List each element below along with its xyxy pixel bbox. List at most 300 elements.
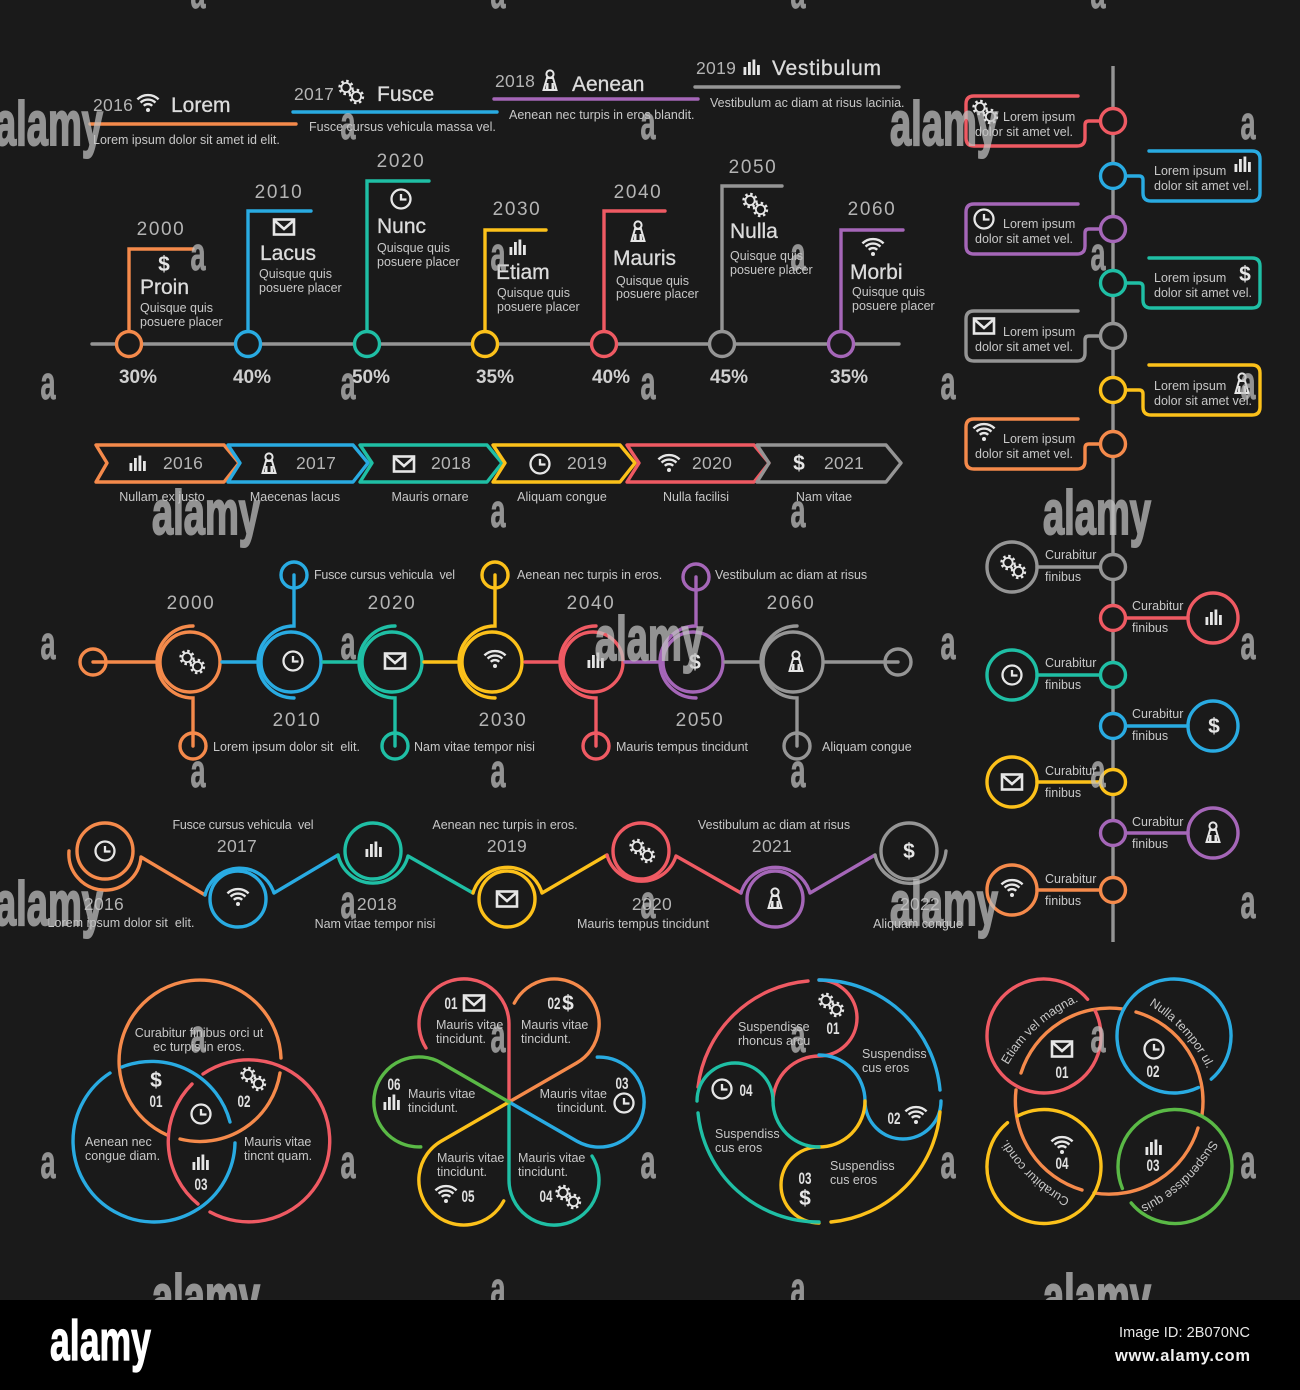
zig node 2021: 2021 [752, 836, 792, 856]
flag 2040 Mauris: Quisque quis [616, 274, 689, 288]
callout left orange [966, 419, 1126, 469]
stock watermark: a [190, 1009, 206, 1062]
green ring 03: 03 [1146, 1156, 1160, 1175]
flower item 06: 06 [388, 1075, 400, 1094]
stock watermark: a [190, 227, 206, 280]
flag 2000 Proin: Quisque quis [140, 301, 213, 315]
flower item 04: 04 [540, 1187, 553, 1206]
callout left purple: dolor sit amet vel. [975, 232, 1073, 246]
node 2050 dollar [625, 564, 867, 731]
flag 2020 Nunc: Nunc [377, 215, 426, 238]
blue ring 02: 02 [1146, 1062, 1160, 1081]
callout right teal [1100, 258, 1260, 308]
flag 2050 Nulla: 45% [710, 367, 748, 388]
node 2040 bars: 2040 [567, 593, 615, 614]
yellow ring 04 [985, 1108, 1103, 1226]
red ring [168, 1060, 330, 1222]
flag 2010 Lacus: posuere placer [259, 281, 342, 295]
venn labels: Mauris vitae [244, 1135, 311, 1149]
flag 2000 Proin [116, 219, 223, 388]
branch right red [1100, 593, 1238, 643]
branch right blue: $ [1208, 715, 1220, 738]
swirl yellow [781, 1101, 940, 1223]
branch right purple: Curabitur [1132, 815, 1183, 829]
stock watermark: alamy [0, 870, 103, 939]
flower item 01: tincidunt. [436, 1032, 486, 1046]
stock watermark: a [790, 1009, 806, 1062]
stock watermark: a [790, 484, 806, 537]
flower item 03: Mauris vitae [540, 1087, 607, 1101]
callout left grey: dolor sit amet vel. [975, 340, 1073, 354]
stock watermark: a [1240, 356, 1256, 409]
flag 2060 Morbi: 2060 [848, 199, 896, 220]
petal green [357, 1040, 509, 1180]
swirl item 03: Suspendiss [830, 1159, 895, 1173]
flag 2020 Nunc: posuere placer [377, 255, 460, 269]
zig node 2022: Aliquam congue [873, 917, 963, 931]
step 2019 Vestibulum: Vestibulum ac diam at risus lacinia. [710, 96, 905, 110]
swirl teal [697, 1063, 819, 1222]
stock watermark: alamy [1043, 1263, 1151, 1332]
stock watermark: a [1240, 616, 1256, 669]
flower item 02 [521, 992, 588, 1046]
zig node 2017: Fusce cursus vehicula vel [172, 818, 314, 832]
venn labels: Aenean nec [85, 1135, 152, 1149]
stock watermark: a [790, 227, 806, 280]
blue ring 02: Nulla tempor ul. [1150, 998, 1214, 1068]
flag 2000 Proin: $ [158, 253, 170, 276]
chevron 2017 [228, 445, 368, 504]
branch left teal: Curabitur [1045, 656, 1096, 670]
step 2018 Aenean: 2018 [495, 71, 535, 91]
flower item 04: Mauris vitae [518, 1151, 585, 1165]
venn icons: 02 [238, 1092, 250, 1111]
stock watermark: alamy [1043, 479, 1151, 548]
swirl item 02: Suspendiss [862, 1047, 927, 1061]
branch right blue: Curabitur [1132, 707, 1183, 721]
chevron 2016: 2016 [163, 453, 203, 473]
flag 2050 Nulla [710, 157, 813, 388]
venn icons: 01 [150, 1092, 162, 1111]
step 2017 Fusce: Fusce cursus vehicula massa vel. [309, 120, 496, 134]
flower item 02: $ [562, 992, 574, 1015]
step 2019 Vestibulum [695, 57, 905, 110]
swirl item 04: Suspendiss [715, 1127, 780, 1141]
stock watermark: alamy [0, 90, 103, 159]
callout left red: dolor sit amet vel. [975, 125, 1073, 139]
branch left orange [987, 865, 1126, 915]
flag 2040 Mauris: Mauris [613, 247, 676, 270]
flag 2050 Nulla: Quisque quis [730, 249, 803, 263]
swirl item 04: 04 [740, 1081, 753, 1100]
node 2020 mail: Nam vitae tempor nisi [414, 740, 535, 754]
branch right blue [1100, 701, 1238, 751]
branch right red: Curabitur [1132, 599, 1183, 613]
swirl item 04: cus eros [715, 1141, 762, 1155]
node 2010 clock: Fusce cursus vehicula vel [314, 568, 455, 582]
venn labels: Curabitur finibus orci ut [135, 1026, 264, 1040]
venn labels: tincnt quam. [244, 1149, 312, 1163]
flag 2000 Proin: 30% [119, 367, 157, 388]
callout left red [966, 96, 1126, 146]
swirl blue [819, 980, 941, 1139]
node 2050 dollar: 2050 [676, 710, 724, 731]
stock watermark: a [940, 616, 956, 669]
callout left orange: dolor sit amet vel. [975, 447, 1073, 461]
node 2040 bars: Mauris tempus tincidunt [616, 740, 749, 754]
stock watermark: a [640, 96, 656, 149]
chevron 2021 [757, 445, 901, 504]
venn icons [150, 1068, 265, 1194]
node 2030 wifi: Aenean nec turpis in eros. [517, 568, 662, 582]
stock watermark: a [1090, 744, 1106, 797]
node 2060 person [725, 593, 912, 759]
zig node 2020: Mauris tempus tincidunt [577, 917, 710, 931]
flower item 03: tincidunt. [557, 1101, 607, 1115]
panel: venn diagram [73, 980, 330, 1222]
flower item 06: Mauris vitae [408, 1087, 475, 1101]
callout right yellow: Lorem ipsum [1154, 379, 1226, 393]
branch right blue: finibus [1132, 729, 1168, 743]
zig node 2021: Vestibulum ac diam at risus [698, 818, 850, 832]
callout right teal: dolor sit amet vel. [1154, 286, 1252, 300]
stock watermark: a [1090, 1009, 1106, 1062]
petal yellow [402, 1102, 554, 1241]
green ring 03: Suspendisse quis [1142, 1141, 1218, 1212]
stock watermark: a [640, 875, 656, 928]
zig node 2018 [315, 823, 473, 931]
venn icons: $ [150, 1069, 162, 1092]
blue ring 02 [1115, 977, 1233, 1095]
zig node 2019: 2019 [487, 836, 527, 856]
node 2050 dollar: Vestibulum ac diam at risus [715, 568, 867, 582]
flag 2050 Nulla: posuere placer [730, 263, 813, 277]
venn icons: 03 [194, 1175, 208, 1194]
chevron 2017: 2017 [296, 453, 336, 473]
callout right blue: Lorem ipsum [1154, 164, 1226, 178]
callout left orange: Lorem ipsum [1003, 432, 1075, 446]
venn labels: ec turpis in eros. [153, 1040, 245, 1054]
node 2060 person: 2060 [767, 593, 815, 614]
stock watermark: a [1240, 96, 1256, 149]
flag 2060 Morbi: 35% [830, 367, 868, 388]
swirl item 02 [862, 1047, 927, 1128]
flag 2030 Etiam: Etiam [496, 261, 550, 284]
panel: overlapping rings [985, 977, 1234, 1226]
flower item 01: Mauris vitae [436, 1018, 503, 1032]
branch left grey: finibus [1045, 570, 1081, 584]
footer band: Image ID: 2B070NC [1119, 1325, 1250, 1341]
flag 2020 Nunc: Quisque quis [377, 241, 450, 255]
flower item 05 [435, 1151, 504, 1206]
node 2000 gear: Lorem ipsum dolor sit elit. [213, 740, 360, 754]
panel: circle node timeline [80, 562, 912, 759]
callout left purple [966, 204, 1126, 254]
flag 2000 Proin: 2000 [137, 219, 185, 240]
branch left teal [987, 650, 1126, 700]
stock watermark: alamy [152, 1263, 260, 1332]
step 2017 Fusce: 2017 [294, 84, 334, 104]
petal blue [509, 1024, 661, 1164]
petal orange [464, 963, 616, 1102]
node 2030 wifi [424, 562, 662, 731]
flag 2030 Etiam: posuere placer [497, 300, 580, 314]
swirl red [698, 980, 857, 1101]
swirl item 03 [798, 1159, 895, 1210]
stock watermark: a [490, 1009, 506, 1062]
chevron 2021: $ [793, 452, 805, 475]
petal red [419, 979, 509, 1102]
callout right teal: $ [1239, 263, 1251, 286]
stock watermark: alamy [152, 479, 260, 548]
flag 2030 Etiam: 2030 [493, 199, 541, 220]
flag 2050 Nulla: 2050 [729, 157, 777, 178]
flag 2060 Morbi: Quisque quis [852, 285, 925, 299]
flower item 03: 03 [616, 1074, 628, 1093]
stock watermark: a [40, 1135, 56, 1188]
panel: zigzag timeline [48, 818, 963, 931]
panel: flower diagram [357, 963, 661, 1241]
swirl item 02: cus eros [862, 1061, 909, 1075]
node 2000 gear [80, 593, 360, 759]
node 2040 bars [525, 593, 749, 759]
step 2016 Lorem [90, 94, 296, 147]
flag 2060 Morbi: Morbi [850, 261, 903, 284]
flag 2020 Nunc [352, 151, 460, 388]
chevron 2016 [96, 445, 239, 504]
chevron 2016: Nullam ex justo [119, 490, 205, 504]
flag 2000 Proin: posuere placer [140, 315, 223, 329]
step 2019 Vestibulum: Vestibulum [772, 57, 881, 80]
axis line [92, 342, 899, 346]
zig node 2021 [698, 818, 875, 927]
flag 2030 Etiam: Quisque quis [497, 286, 570, 300]
step 2016 Lorem: 2016 [93, 95, 133, 115]
panel: chevron timeline [96, 445, 901, 504]
step 2017 Fusce: Fusce [377, 83, 434, 106]
stock watermark: a [40, 616, 56, 669]
flower item 03 [540, 1074, 634, 1115]
zig node 2019: Aenean nec turpis in eros. [432, 818, 578, 832]
panel: staircase timeline [90, 57, 905, 147]
branch left yellow [987, 757, 1126, 807]
stock watermark: alamy [890, 90, 998, 159]
stock watermark: a [940, 356, 956, 409]
petal teal [509, 1102, 599, 1225]
stock watermark: a [490, 484, 506, 537]
step 2016 Lorem: Lorem [171, 94, 231, 117]
flag 2030 Etiam [472, 199, 580, 388]
zig node 2017: 2017 [217, 836, 257, 856]
zig node 2018: Nam vitae tempor nisi [315, 917, 435, 931]
swirl item 01: rhoncus arcu [738, 1034, 810, 1048]
branch right purple [1100, 808, 1238, 858]
swirl item 01: Suspendisse [738, 1020, 810, 1034]
stock watermark: a [340, 356, 356, 409]
red ring 01 [985, 977, 1103, 1095]
branch left teal: finibus [1045, 678, 1081, 692]
stock watermark: a [790, 744, 806, 797]
callout left purple: Lorem ipsum [1003, 217, 1075, 231]
stock watermark: a [340, 96, 356, 149]
flag 2060 Morbi [828, 199, 935, 388]
node 2010 clock: 2010 [273, 710, 321, 731]
vertical axis [1111, 66, 1115, 942]
footer band: alamy [50, 1309, 151, 1373]
callout right yellow [1100, 365, 1260, 415]
flag 2040 Mauris: 2040 [614, 182, 662, 203]
stock watermark: a [1090, 227, 1106, 280]
branch left grey [987, 542, 1126, 592]
node 2030 wifi: 2030 [479, 710, 527, 731]
stock watermark: a [40, 356, 56, 409]
node 2000 gear: 2000 [167, 593, 215, 614]
flower item 06: tincidunt. [408, 1101, 458, 1115]
zig node 2022 [873, 823, 963, 931]
step 2017 Fusce [293, 81, 497, 134]
flag 2020 Nunc: 2020 [377, 151, 425, 172]
yellow ring 04: 04 [1056, 1154, 1069, 1173]
step 2019 Vestibulum: 2019 [696, 58, 736, 78]
chevron 2017: Maecenas lacus [250, 490, 340, 504]
stock watermark: a [490, 1262, 506, 1315]
callout right yellow: dolor sit amet vel. [1154, 394, 1252, 408]
chevron 2021: 2021 [824, 453, 864, 473]
swirl item 01 [738, 994, 843, 1048]
swirl item 04 [712, 1080, 780, 1155]
flower item 05: tincidunt. [437, 1165, 487, 1179]
flower item 05: Mauris vitae [437, 1151, 504, 1165]
node 2060 person: Aliquam congue [822, 740, 912, 754]
zig node 2022: 2022 [900, 894, 940, 914]
branch right purple: finibus [1132, 837, 1168, 851]
stock watermark: alamy [595, 605, 703, 674]
branch right red: finibus [1132, 621, 1168, 635]
stock watermark: a [340, 1135, 356, 1188]
branch left yellow: Curabitur [1045, 764, 1096, 778]
flag 2010 Lacus: 40% [233, 367, 271, 388]
chevron 2018: Mauris ornare [391, 490, 469, 504]
big orange ring [1015, 1008, 1203, 1194]
step 2018 Aenean: Aenean [572, 73, 644, 96]
branch left orange: Curabitur [1045, 872, 1096, 886]
swirl item 02: 02 [888, 1109, 900, 1128]
flower item 02: tincidunt. [521, 1032, 571, 1046]
stock watermark: a [640, 1135, 656, 1188]
flag 2010 Lacus: Lacus [260, 242, 316, 265]
step 2016 Lorem: Lorem ipsum dolor sit amet id elit. [93, 133, 280, 147]
swirl item 03: 03 [798, 1169, 812, 1188]
zig node 2020: 2020 [632, 894, 672, 914]
flag 2010 Lacus: Quisque quis [259, 267, 332, 281]
zig node 2016: Lorem ipsum dolor sit elit. [48, 916, 194, 930]
venn labels [85, 1026, 312, 1163]
stock watermark: alamy [890, 870, 998, 939]
callout left red: Lorem ipsum [1003, 110, 1075, 124]
node 2020 mail [323, 593, 535, 759]
panel: vertical timeline [966, 66, 1260, 942]
stock watermark: a [490, 744, 506, 797]
zig node 2018: 2018 [357, 894, 397, 914]
node 2010 clock [222, 562, 455, 731]
green ring 03 [1116, 1108, 1234, 1226]
flower item 02: Mauris vitae [521, 1018, 588, 1032]
flower item 01: 01 [444, 994, 458, 1013]
zig node 2022: $ [903, 840, 915, 863]
flag 2010 Lacus [233, 182, 342, 388]
zig node 2016 [48, 823, 205, 930]
chevron 2019: 2019 [567, 453, 607, 473]
stock watermark: a [340, 875, 356, 928]
step 2018 Aenean: Aenean nec turpis in eros blandit. [509, 108, 695, 122]
flag 2050 Nulla: Nulla [730, 220, 778, 243]
node 2020 mail: 2020 [368, 593, 416, 614]
flag 2040 Mauris [592, 182, 699, 388]
chevron 2020 [627, 445, 769, 504]
flower item 04 [518, 1151, 585, 1208]
zig node 2016: 2016 [84, 894, 124, 914]
step 2018 Aenean [494, 70, 698, 122]
blue ring [73, 1061, 235, 1222]
flag 2010 Lacus: 2010 [255, 182, 303, 203]
stock watermark: a [490, 227, 506, 280]
panel: swirl circle [697, 980, 941, 1223]
panel: flag timeline [92, 151, 935, 388]
callout right blue: dolor sit amet vel. [1154, 179, 1252, 193]
swirl item 01: 01 [826, 1019, 840, 1038]
venn labels: congue diam. [85, 1149, 160, 1163]
stock watermark: a [1240, 875, 1256, 928]
chevron 2019: Aliquam congue [517, 490, 607, 504]
swirl item 03: cus eros [830, 1173, 877, 1187]
stock watermark: a [940, 1135, 956, 1188]
footer band: www.alamy.com [1114, 1347, 1250, 1365]
stock watermark: a [790, 1262, 806, 1315]
stock watermark: a [640, 356, 656, 409]
swirl item 03: $ [799, 1187, 811, 1210]
branch left orange: finibus [1045, 894, 1081, 908]
yellow ring 04: Curabitur condi. [1001, 1140, 1068, 1206]
stock watermark: a [1240, 1135, 1256, 1188]
flag 2030 Etiam: 35% [476, 367, 514, 388]
zig node 2020 [577, 823, 741, 931]
orange ring [119, 980, 281, 1142]
flag 2040 Mauris: posuere placer [616, 287, 699, 301]
chevron 2020: 2020 [692, 453, 732, 473]
callout left grey: Lorem ipsum [1003, 325, 1075, 339]
chevron 2020: Nulla facilisi [663, 490, 729, 504]
chevron 2018: 2018 [431, 453, 471, 473]
callout left grey [966, 311, 1126, 361]
flag 2020 Nunc: 50% [352, 367, 390, 388]
red ring 01: 01 [1056, 1063, 1068, 1082]
zig node 2017 [172, 818, 338, 927]
red ring 01: Etiam vel magna. [1001, 998, 1078, 1064]
flower item 02: 02 [548, 994, 560, 1013]
flower item 01 [436, 994, 503, 1046]
flag 2040 Mauris: 40% [592, 367, 630, 388]
flower item 05: 05 [462, 1187, 474, 1206]
flower item 04: tincidunt. [518, 1165, 568, 1179]
zig node 2019 [432, 818, 607, 927]
callout right blue [1100, 151, 1260, 201]
stock watermark: a [340, 616, 356, 669]
stock watermark: a [190, 744, 206, 797]
branch left yellow: finibus [1045, 786, 1081, 800]
flower item 06 [384, 1075, 475, 1115]
node 2050 dollar: $ [689, 651, 701, 674]
chevron 2021: Nam vitae [796, 490, 852, 504]
